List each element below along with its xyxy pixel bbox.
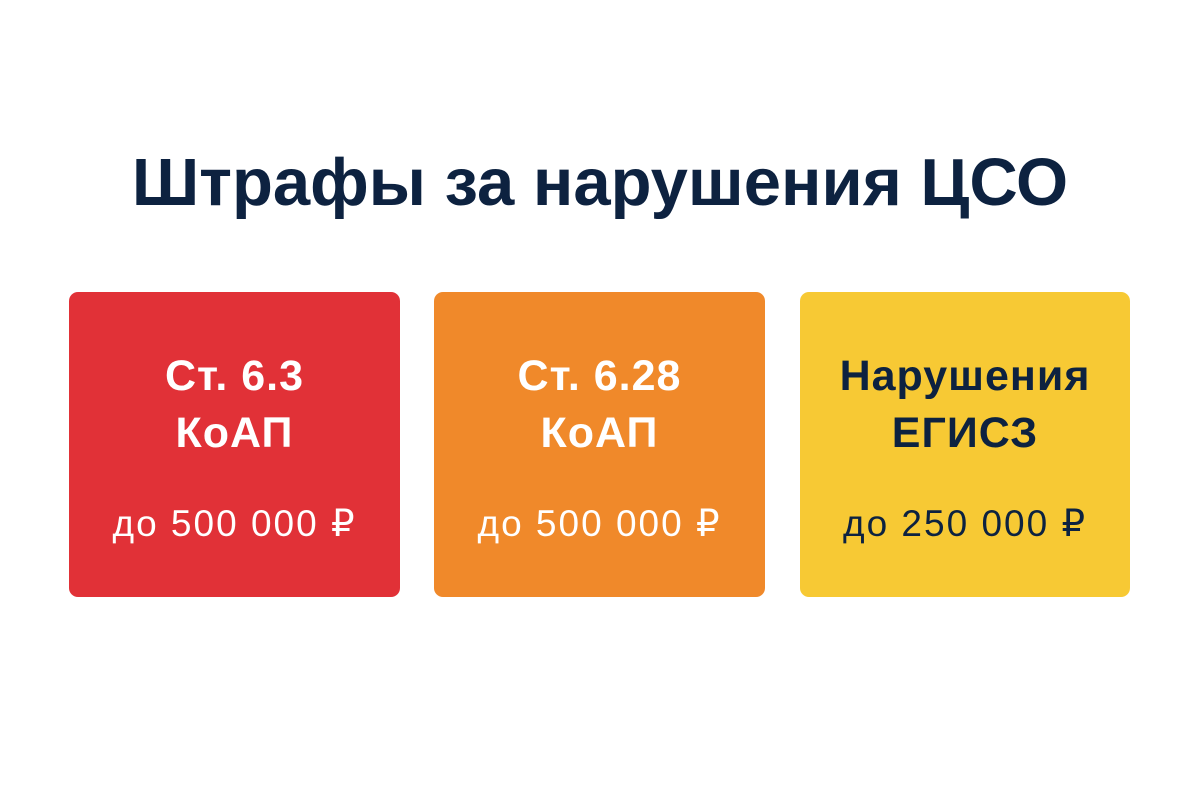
card heading: КоАП: [541, 409, 658, 457]
card fine: до 500 000 ₽: [112, 503, 356, 544]
card fine: до 250 000 ₽: [843, 503, 1087, 544]
panel: card 6.28: [434, 292, 765, 597]
panel: card ЕГИСЗ: [800, 292, 1130, 597]
card heading: [165, 352, 304, 457]
card fine: до 500 000 ₽: [477, 503, 722, 544]
card heading: [518, 352, 681, 457]
title: Штрафы за нарушения ЦСО: [132, 145, 1068, 220]
card heading: ЕГИСЗ: [892, 409, 1038, 457]
card heading: Ст. 6.28: [518, 352, 681, 400]
card heading: Нарушения: [840, 352, 1090, 400]
card heading: [840, 352, 1090, 457]
card heading: КоАП: [176, 409, 293, 457]
panel: card 6.3: [69, 292, 400, 597]
card heading: Ст. 6.3: [165, 352, 304, 400]
